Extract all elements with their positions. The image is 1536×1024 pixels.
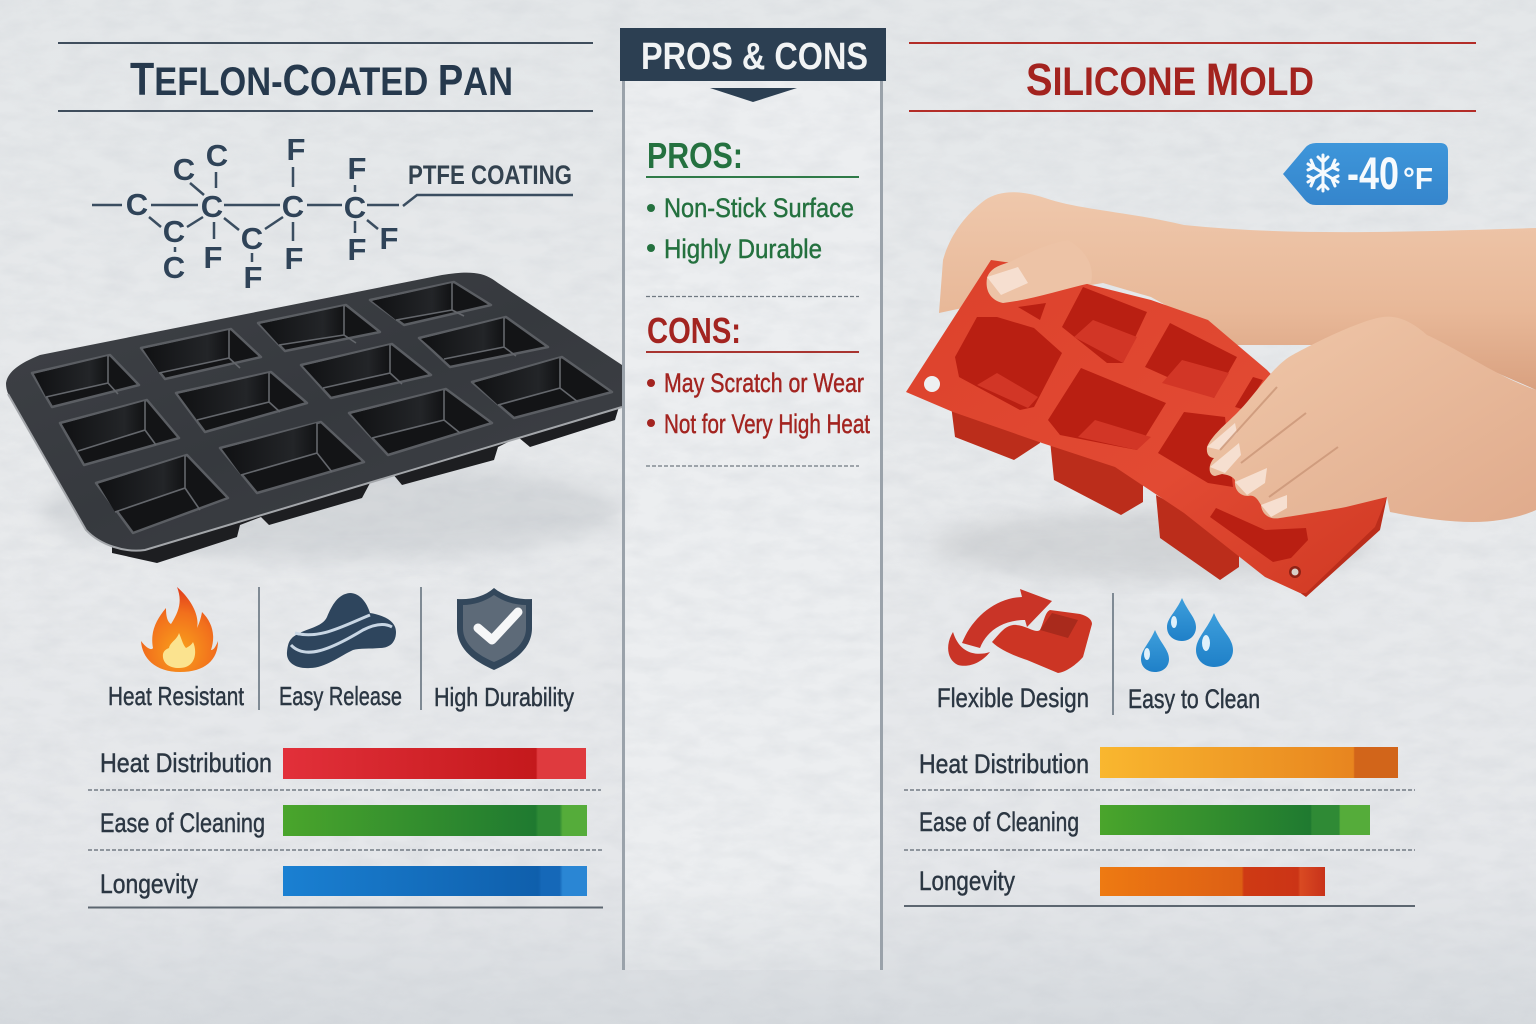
- pros list: Highly Durable: [664, 234, 822, 264]
- rating: left ease of cleaning: [100, 805, 587, 838]
- PTFE molecule diagram: F: [244, 260, 262, 295]
- temperature tag -40F: -40: [1347, 148, 1399, 199]
- feature dividers left: [258, 587, 422, 710]
- PTFE molecule diagram: F: [204, 240, 222, 275]
- icon: thumb of upper hand: [987, 240, 1092, 303]
- rating: right longevity: [919, 866, 1325, 896]
- PTFE molecule diagram: C: [282, 189, 304, 224]
- center banner: pros and cons: [620, 28, 886, 102]
- rating: right heat distribution: [919, 747, 1398, 779]
- temperature tag -40F: [1283, 143, 1448, 205]
- pros list: [646, 135, 859, 264]
- temperature tag -40F: °F: [1403, 161, 1433, 196]
- feature divider right: [1112, 593, 1114, 715]
- rating: left longevity: Longevity: [100, 869, 198, 899]
- rating: right ease of cleaning: [919, 805, 1370, 837]
- rating: right heat distribution: Heat Distribution: [919, 749, 1089, 779]
- PTFE molecule diagram: C: [344, 190, 366, 225]
- label: heat resistant: Heat Resistant: [108, 681, 245, 711]
- rating: left ease of cleaning: Ease of Cleaning: [100, 808, 265, 838]
- label: easy release: Easy Release: [279, 681, 402, 711]
- PTFE molecule diagram: C: [201, 189, 223, 224]
- pros list: PROS:: [647, 135, 743, 176]
- rating: right ease of cleaning: Ease of Cleaning: [919, 807, 1079, 837]
- icon: lower hand: [1207, 317, 1536, 522]
- PTFE molecule diagram: C: [126, 187, 148, 222]
- icon: easy release: [287, 593, 396, 668]
- PTFE molecule diagram: F: [348, 151, 366, 186]
- center banner: pros and cons: PROS & CONS: [641, 36, 868, 78]
- rating: left heat distribution: Heat Distribution: [100, 748, 272, 778]
- PTFE coating label: PTFE COATING: [408, 160, 572, 190]
- silicone mold held by hands: [906, 192, 1536, 597]
- PTFE molecule diagram: F: [348, 232, 366, 267]
- cons list: CONS:: [647, 310, 741, 351]
- PTFE molecule diagram: F: [285, 241, 303, 276]
- icon: water drops: [1141, 598, 1233, 672]
- PTFE molecule diagram: F: [380, 221, 398, 256]
- right title: Silicone Mold: SILICONE MOLD: [1026, 54, 1314, 105]
- rating: right longevity: Longevity: [919, 866, 1015, 896]
- rating: left longevity: [100, 866, 587, 899]
- PTFE molecule diagram: F: [287, 132, 305, 167]
- cons list: May Scratch or Wear: [664, 368, 864, 398]
- icon: flame: [141, 587, 218, 672]
- PTFE molecule diagram: C: [163, 214, 185, 249]
- label: easy to clean: Easy to Clean: [1128, 684, 1260, 714]
- Teflon baking pan illustration: [6, 273, 622, 563]
- cons list: [646, 310, 870, 439]
- cons list: Not for Very High Heat: [664, 409, 870, 439]
- label: flexible design: Flexible Design: [937, 683, 1089, 713]
- center column rules: [622, 80, 883, 970]
- PTFE molecule diagram: C: [206, 138, 228, 173]
- PTFE molecule diagram: [92, 132, 573, 295]
- PTFE molecule diagram: C: [163, 250, 185, 285]
- label: high durability: High Durability: [434, 682, 574, 712]
- icon: durability shield: [457, 588, 532, 670]
- pros list: Non-Stick Surface: [664, 193, 854, 223]
- icon: upper hand and arm: [939, 192, 1536, 390]
- PTFE molecule diagram: C: [241, 221, 263, 256]
- left title: Teflon-Coated Pan: TEFLON-COATED PAN: [130, 53, 513, 105]
- icon: flexible design: [948, 589, 1092, 673]
- rating: left heat distribution: [100, 748, 586, 779]
- PTFE molecule diagram: C: [173, 152, 195, 187]
